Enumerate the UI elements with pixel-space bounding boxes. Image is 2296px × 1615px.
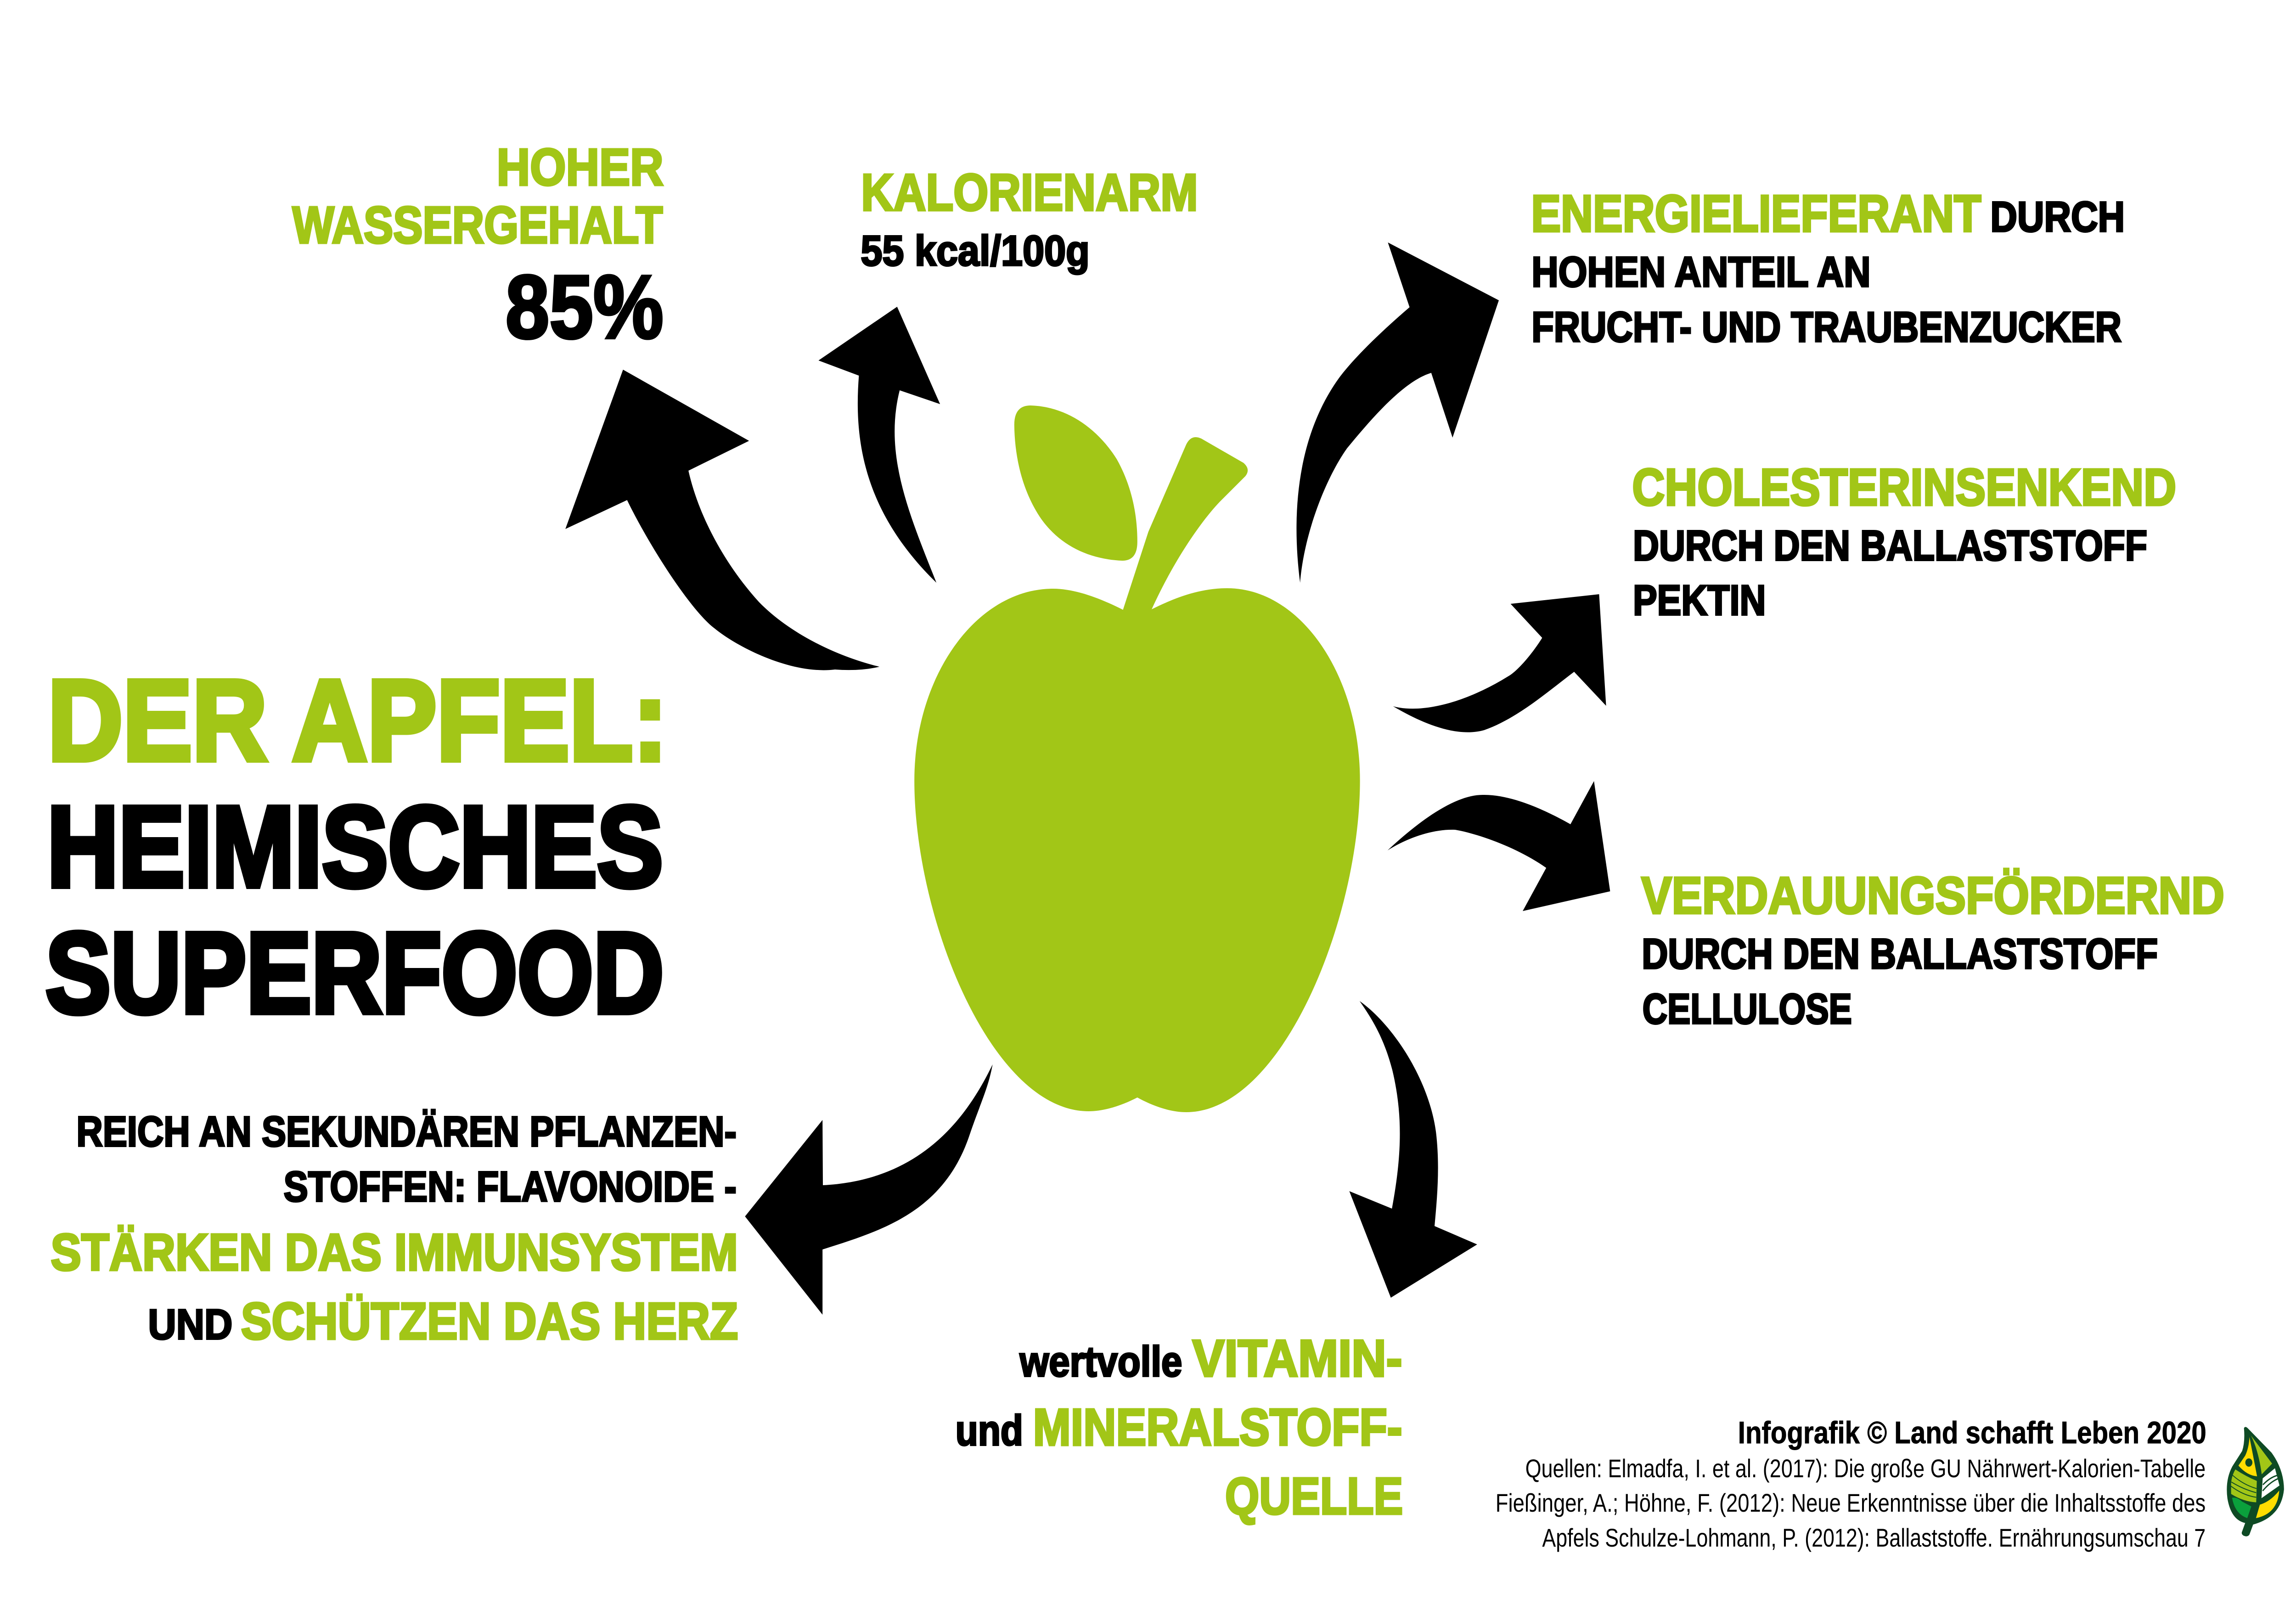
text block: energy supplier: FRUCHT- UND TRAUBENZUCKER bbox=[1531, 303, 2122, 351]
text block: low calorie bbox=[861, 163, 1198, 275]
text block: vitamins and minerals bbox=[956, 1329, 1403, 1525]
text block: high water content: WASSERGEHALT bbox=[293, 196, 663, 254]
apple stem bbox=[1120, 437, 1248, 618]
text block: cholesterol lowering: CHOLESTERINSENKEND bbox=[1632, 458, 2176, 516]
text block: aids digestion: CELLULOSE bbox=[1643, 985, 1852, 1033]
text block: aids digestion: DURCH DEN BALLASTSTOFF bbox=[1642, 930, 2158, 978]
text block: aids digestion: VERDAUUNGSFÖRDERND bbox=[1641, 866, 2224, 924]
text block: low calorie: KALORIENARM bbox=[861, 163, 1198, 221]
text block: high water content: 85% bbox=[506, 256, 664, 357]
arrow: to secondary plant compounds bbox=[745, 1064, 993, 1315]
text block: vitamins and minerals: MINERALSTOFF- bbox=[1033, 1398, 1402, 1456]
text block: secondary plant compounds: STOFFEN: FLAVONOIDE - bbox=[284, 1163, 737, 1210]
title: SUPERFOOD bbox=[45, 909, 664, 1037]
text block: cholesterol lowering: DURCH DEN BALLASTSTOFF bbox=[1633, 522, 2147, 569]
credits and sources bbox=[1496, 1415, 2206, 1552]
apple leaf bbox=[1014, 405, 1137, 561]
text block: cholesterol lowering: PEKTIN bbox=[1633, 576, 1766, 624]
credits and sources: Infografik © Land schafft Leben 2020 bbox=[1738, 1415, 2206, 1450]
text block: low calorie: 55 kcal/100g bbox=[861, 227, 1090, 275]
text block: vitamins and minerals: und bbox=[956, 1407, 1023, 1454]
text block: energy supplier: DURCH bbox=[1990, 193, 2125, 241]
text block: vitamins and minerals: wertvolle bbox=[1019, 1338, 1182, 1385]
text block: energy supplier: ENERGIELIEFERANT bbox=[1531, 184, 1981, 242]
text block: secondary plant compounds: SCHÜTZEN DAS HERZ bbox=[241, 1292, 738, 1350]
arrow: to water content bbox=[565, 370, 879, 670]
text block: secondary plant compounds: UND bbox=[148, 1300, 232, 1348]
text block: vitamins and minerals: QUELLE bbox=[1225, 1467, 1403, 1525]
title: HEIMISCHES bbox=[47, 782, 663, 911]
text block: cholesterol lowering bbox=[1632, 458, 2176, 624]
text block: secondary plant compounds: STÄRKEN DAS IMMUNSYSTEM bbox=[51, 1223, 738, 1281]
text block: energy supplier: HOHEN ANTEIL AN bbox=[1531, 248, 1871, 296]
text block: energy supplier bbox=[1531, 184, 2125, 351]
text block: high water content: HOHER bbox=[497, 138, 664, 196]
arrow: to vitamins and minerals bbox=[1349, 1001, 1477, 1298]
text block: secondary plant compounds bbox=[51, 1108, 738, 1350]
credits and sources: Fießinger, A.; Höhne, F. (2012): Neue Erkenntnisse über die Inhaltsstoffe des bbox=[1496, 1488, 2206, 1517]
apple illustration bbox=[914, 405, 1360, 1112]
credits and sources: Quellen: Elmadfa, I. et al. (2017): Die große GU Nährwert-Kalorien-Tabelle bbox=[1525, 1454, 2206, 1483]
icon: Land schafft Leben leaf logo bbox=[2227, 1427, 2284, 1536]
arrow: to cholesterol lowering bbox=[1393, 594, 1606, 732]
text block: vitamins and minerals: VITAMIN- bbox=[1193, 1329, 1402, 1387]
arrow: to low calorie bbox=[818, 307, 940, 583]
title bbox=[45, 656, 668, 1037]
arrow: to energy supplier bbox=[1296, 242, 1499, 583]
text block: high water content bbox=[293, 138, 664, 357]
credits and sources: Apfels Schulze-Lohmann, P. (2012): Ballaststoffe. Ernährungsumschau 7 bbox=[1542, 1523, 2206, 1552]
arrow: to digestion bbox=[1388, 781, 1610, 911]
apple body bbox=[914, 588, 1360, 1112]
text block: aids digestion bbox=[1641, 866, 2224, 1033]
title: DER APFEL: bbox=[48, 656, 668, 784]
text block: secondary plant compounds: REICH AN SEKUNDÄREN PFLANZEN- bbox=[76, 1108, 737, 1155]
